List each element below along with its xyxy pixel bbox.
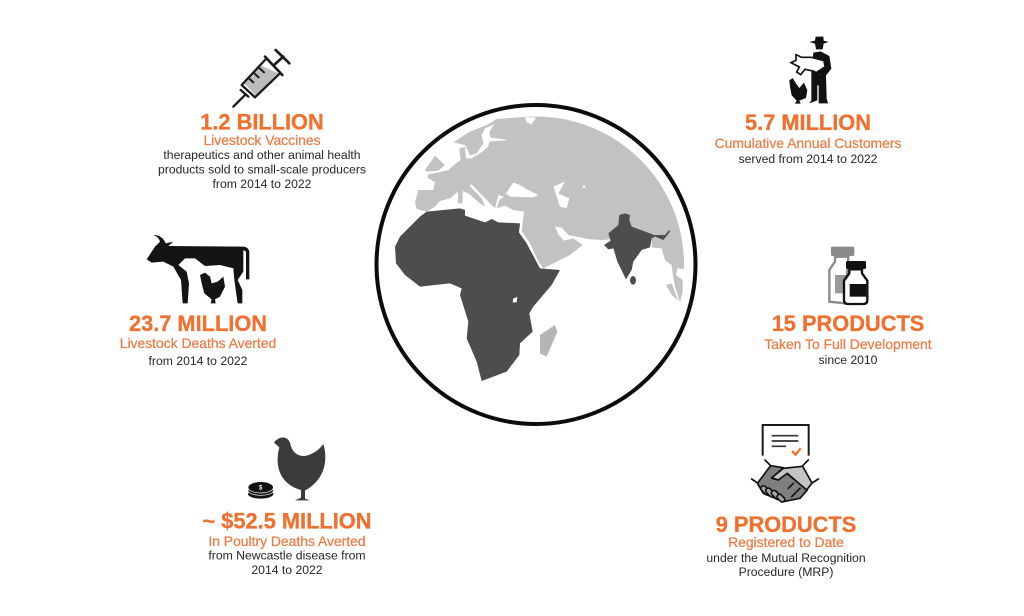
stat: livestock vaccines: Livestock Vaccines: [203, 132, 321, 148]
stat: products developed: Taken To Full Development: [764, 336, 932, 352]
seas: [506, 117, 569, 208]
stat: customers: Cumulative Annual Customers: [715, 135, 901, 151]
sardinia and corsica: [458, 190, 463, 203]
icon: hen and coins: [248, 437, 325, 500]
icon: vials: [829, 247, 867, 304]
india: [604, 213, 670, 279]
stat: poultry deaths: from Newcastle disease from: [208, 548, 366, 562]
stat: poultry deaths: 2014 to 2022: [251, 563, 323, 577]
madagascar: [540, 325, 557, 357]
icon: syringe: [233, 50, 289, 107]
stat: poultry deaths: In Poultry Deaths Averted: [208, 533, 366, 549]
stat: products developed: since 2010: [819, 353, 878, 367]
dollar sign: $: [259, 485, 263, 491]
stat: livestock vaccines: from 2014 to 2022: [213, 177, 312, 191]
stat: customers: served from 2014 to 2022: [739, 152, 878, 166]
stat: customers: 5.7 MILLION: [745, 110, 871, 135]
stat: livestock vaccines: [158, 50, 366, 191]
stat: products registered: Registered to Date: [728, 534, 844, 550]
africa: [395, 208, 560, 381]
sumatra: [666, 283, 678, 301]
icon: cow with chicken: [147, 235, 249, 303]
globe map: [376, 105, 696, 424]
stat: livestock vaccines: therapeutics and other animal health: [163, 148, 361, 162]
stat: livestock vaccines: products sold to small-scale producers: [158, 162, 366, 176]
stat: deaths averted: from 2014 to 2022: [149, 354, 248, 368]
lake victoria: [513, 297, 517, 302]
stat: deaths averted: Livestock Deaths Averted: [120, 335, 276, 351]
sri lanka: [630, 276, 636, 285]
aral sea: [583, 185, 585, 188]
stat: products registered: under the Mutual Recognition: [706, 551, 866, 565]
stat: products developed: [764, 247, 932, 367]
stat: products registered: [706, 425, 866, 579]
stat: poultry deaths: ~ $52.5 MILLION: [203, 508, 371, 534]
stat: poultry deaths: [203, 437, 371, 577]
fingers: [760, 485, 771, 496]
stat: products developed: 15 PRODUCTS: [772, 311, 924, 336]
stat: livestock vaccines: 1.2 BILLION: [200, 110, 324, 134]
stat: products registered: 9 PRODUCTS: [716, 512, 856, 537]
stat: deaths averted: [120, 235, 276, 368]
icon: farmer with pig and chicken: [789, 37, 831, 104]
uk: [425, 156, 445, 172]
stat: deaths averted: 23.7 MILLION: [129, 311, 267, 336]
stat: customers: [715, 37, 901, 166]
icon: certificate: [763, 425, 809, 456]
stat: products registered: Procedure (MRP): [739, 565, 833, 579]
icon: handshake: [752, 460, 818, 503]
eurasia landmass: [415, 116, 684, 302]
